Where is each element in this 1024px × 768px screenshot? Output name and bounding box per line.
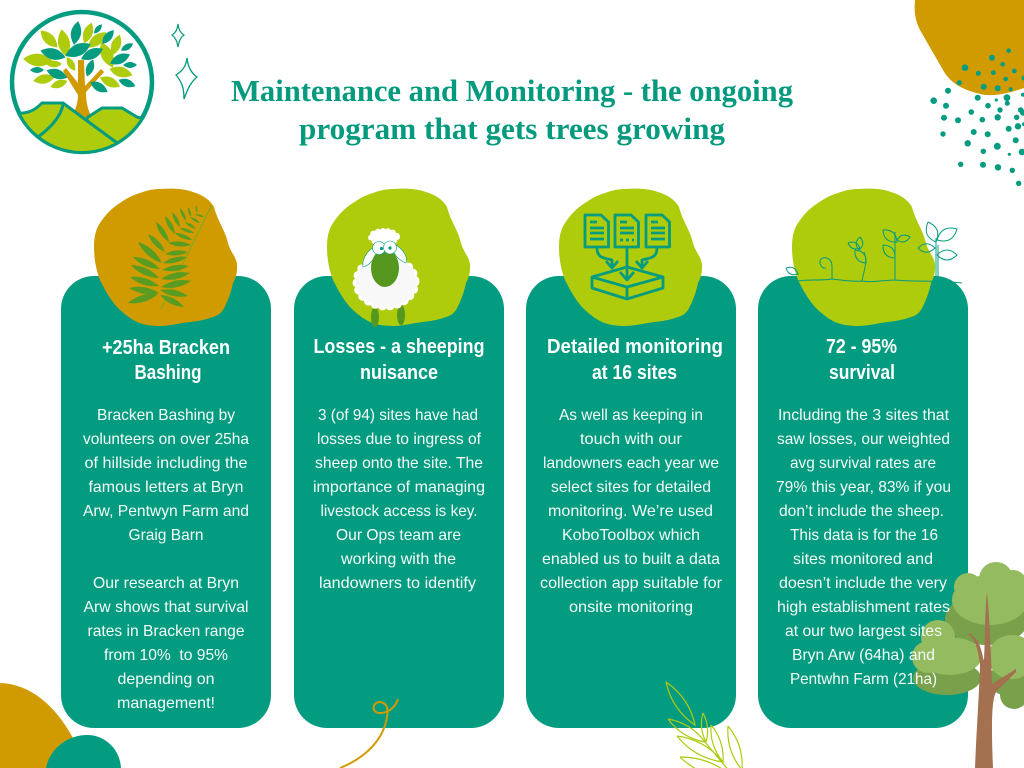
text: survival body: 79% this year, 83% if you	[776, 479, 951, 496]
text: survival body: saw losses, our weighted	[777, 431, 950, 448]
icon: growing seedlings	[784, 220, 962, 283]
heading: +25ha Bracken Bashing: Bashing	[134, 362, 202, 384]
heading: 72 - 95% survival: survival	[829, 362, 895, 384]
text: detailed monitoring body: landowners each year we	[543, 455, 719, 472]
decoration: orange squiggle	[340, 699, 398, 768]
heading: +25ha Bracken Bashing	[102, 337, 230, 384]
text: detailed monitoring body	[540, 407, 723, 616]
text: losses body: importance of managing	[313, 479, 485, 496]
heading: 72 - 95% survival	[826, 336, 897, 384]
text: detailed monitoring body: monitoring. We’re used	[548, 503, 713, 520]
text: detailed monitoring body: As well as keeping in	[559, 407, 703, 424]
text: survival body: This data is for the 16	[790, 527, 938, 544]
text: survival body: sites monitored and	[793, 551, 933, 568]
text: losses body	[313, 407, 485, 592]
text: losses body: landowners to identify	[319, 575, 476, 592]
heading: Losses - a sheeping nuisance	[314, 336, 484, 384]
text: survival body: doesn’t include the very	[779, 575, 947, 592]
text: bracken bashing body: management!	[117, 695, 215, 712]
heading: Detailed monitoring at 16 sites	[547, 336, 723, 384]
text: losses body: livestock access is key.	[320, 503, 478, 520]
icon: sheep	[356, 231, 416, 327]
text: detailed monitoring body: onsite monitoring	[569, 599, 693, 616]
text: bracken bashing body: from 10% to 95%	[104, 647, 228, 664]
text: bracken bashing body: depending on	[118, 671, 214, 688]
text: bracken bashing body: Bracken Bashing by	[97, 407, 235, 424]
panel: detailed monitoring	[526, 189, 736, 728]
text: bracken bashing body	[83, 407, 249, 712]
logo trunk	[63, 60, 104, 118]
text: survival body: at our two largest sites	[785, 623, 942, 640]
title: Maintenance and Monitoring - the ongoing	[231, 73, 793, 108]
text: survival body: don’t include the sheep.	[779, 503, 944, 520]
text: bracken bashing body: Graig Barn	[128, 527, 204, 544]
text: losses body: working with the	[340, 551, 456, 568]
decoration: top-right teal dots	[930, 48, 1024, 186]
text: survival body: Including the 3 sites that	[778, 407, 950, 424]
icon: bracken frond	[127, 205, 211, 310]
text: bracken bashing body: famous letters at Bryn	[88, 479, 244, 496]
text: bracken bashing body: Arw shows that survival	[84, 599, 248, 616]
text: detailed monitoring body: touch with our	[580, 431, 683, 448]
logo hills	[20, 102, 141, 151]
icon: large sparkle	[176, 58, 197, 99]
blob: lime	[327, 189, 470, 326]
decoration: bottom-left teal blob	[46, 735, 121, 768]
heading: Detailed monitoring at 16 sites: at 16 sites	[592, 362, 677, 384]
blob: lime	[559, 189, 702, 326]
heading: Losses - a sheeping nuisance: Losses - a sheeping	[314, 336, 484, 358]
decoration: bottom-left gold blob	[0, 683, 75, 768]
logo lime leaves	[23, 21, 134, 91]
text: losses body: Our Ops team are	[336, 527, 461, 544]
text: bracken bashing body: Our research at Bryn	[93, 575, 239, 592]
text: bracken bashing body: volunteers on over 25ha	[83, 431, 249, 448]
text: losses body: losses due to ingress of	[317, 431, 482, 448]
text: bracken bashing body: Arw, Pentwyn Farm and	[83, 503, 249, 520]
blob: lime	[792, 189, 935, 326]
logo: tree and hills in circle	[10, 10, 154, 154]
text: losses body: sheep onto the site. The	[315, 455, 483, 472]
text: survival body: avg survival rates are	[790, 455, 936, 472]
panel: bracken bashing	[61, 189, 271, 728]
text: survival body: high establishment rates	[777, 599, 950, 616]
panel: survival	[758, 189, 968, 728]
title	[231, 73, 793, 146]
icon: documents into tray	[585, 215, 670, 299]
decoration: lime outlined fronds	[662, 679, 746, 768]
text: losses body: 3 (of 94) sites have had	[318, 407, 478, 424]
icon: small sparkle	[172, 24, 184, 47]
text: bracken bashing body: rates in Bracken range	[88, 623, 245, 640]
text: detailed monitoring body: KoboToolbox which	[562, 527, 700, 544]
decoration: tree bottom right	[912, 562, 1024, 768]
text: survival body	[776, 407, 951, 688]
text: survival body: Pentwhn Farm (21ha)	[790, 671, 937, 688]
text: bracken bashing body: of hillside including the	[84, 455, 248, 472]
text: detailed monitoring body: select sites for detailed	[551, 479, 711, 496]
blob: gold	[94, 189, 237, 326]
logo teal leaves	[30, 20, 137, 96]
text: detailed monitoring body: enabled us to built a data	[542, 551, 720, 568]
text: survival body: Bryn Arw (64ha) and	[792, 647, 935, 664]
heading: +25ha Bracken Bashing: +25ha Bracken	[102, 337, 230, 359]
title: program that gets trees growing	[299, 111, 725, 146]
text: detailed monitoring body: collection app suitable for	[540, 575, 723, 592]
heading: Losses - a sheeping nuisance: nuisance	[360, 362, 438, 384]
decoration: top-right gold blob	[915, 0, 1024, 95]
heading: Detailed monitoring at 16 sites: Detailed monitoring	[547, 336, 723, 358]
panel: losses	[294, 189, 504, 728]
heading: 72 - 95% survival: 72 - 95%	[826, 336, 897, 358]
